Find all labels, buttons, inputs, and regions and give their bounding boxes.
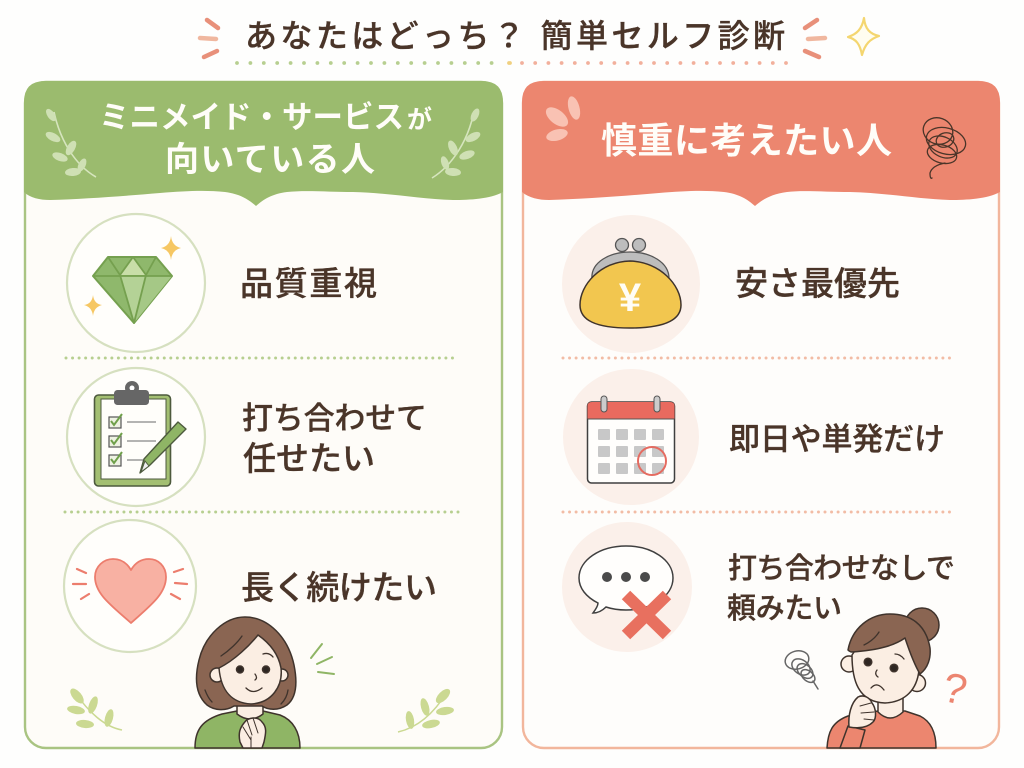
label: cheapest first: 安さ最優先	[735, 265, 900, 302]
divider	[563, 356, 955, 360]
icon: bottom left sprig	[66, 686, 122, 730]
icon: question mark: ?	[939, 663, 971, 714]
label: no meeting: 頼みたい	[727, 592, 842, 625]
label: leave it to them: 任せたい	[243, 440, 375, 477]
icon: green emphasis lines	[311, 644, 334, 674]
panel heading: mini-maid: 向いている人	[165, 141, 375, 179]
icon: header scribble	[919, 114, 969, 178]
label: continue long: 長く続けたい	[241, 569, 437, 606]
icon: calendar	[563, 369, 699, 505]
panel heading: mini-maid	[99, 100, 432, 179]
icon: left title accent lines	[200, 20, 218, 57]
icon: coin purse: ¥	[619, 276, 642, 320]
icon: heart	[64, 520, 196, 652]
title dotted underline	[237, 61, 788, 65]
label: quality: 品質重視	[240, 265, 377, 302]
divider	[65, 510, 459, 514]
icon: bottom right sprig	[398, 686, 454, 732]
icon: header right sprig	[432, 107, 482, 178]
icon: coin purse	[562, 215, 700, 353]
title: あなたはどっち？ 簡単セルフ診断	[245, 18, 785, 54]
panel heading: careful: 慎重に考えたい人	[601, 120, 892, 161]
panel heading: mini-maid: ミニメイド・サービス	[99, 100, 404, 135]
icon: right title accent lines	[805, 20, 825, 57]
label: leave it to them	[242, 401, 427, 477]
icon: header petals	[542, 95, 582, 143]
illustration: thinking woman	[827, 608, 939, 748]
panel: careful people	[522, 81, 1000, 748]
panel header: salmon	[522, 81, 1000, 206]
icon: thinking scribble	[783, 648, 818, 689]
label: no meeting	[727, 552, 955, 625]
illustration: happy woman	[195, 617, 300, 748]
icon: diamond	[67, 214, 205, 352]
divider	[563, 510, 955, 514]
icon: speech bubble crossed	[562, 522, 692, 652]
label: no meeting: 打ち合わせなしで	[728, 552, 955, 585]
panel: suited people	[24, 81, 503, 748]
icon: clipboard	[67, 368, 205, 506]
label: same day only: 即日や単発だけ	[729, 422, 945, 457]
label: leave it to them: 打ち合わせて	[242, 401, 427, 436]
panel heading: mini-maid: が	[407, 105, 432, 134]
icon: header left sprig	[44, 107, 96, 177]
divider	[66, 356, 459, 360]
icon: title sparkle	[848, 18, 879, 55]
panel header: green	[24, 81, 503, 206]
